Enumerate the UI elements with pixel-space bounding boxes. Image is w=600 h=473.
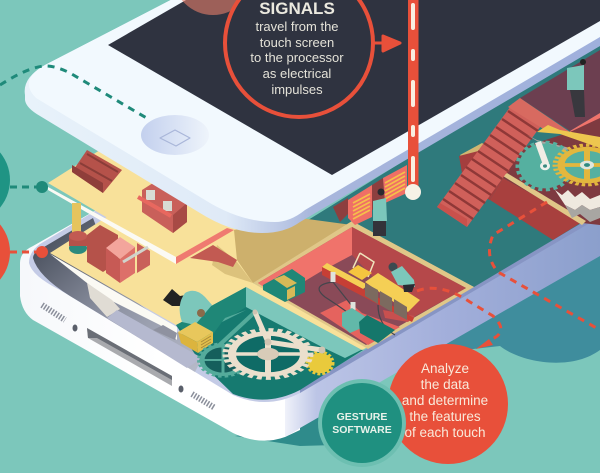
- ivory main gear: [226, 330, 310, 378]
- yellow machine bench: [322, 263, 414, 322]
- signals callout: impulses: [271, 82, 323, 97]
- red room: [253, 221, 474, 349]
- arrow to signal line: [373, 36, 400, 51]
- screw left: [72, 324, 78, 332]
- vertical signal line: [405, 0, 421, 200]
- red arrow head: [476, 339, 493, 349]
- cabinets upper floor: [138, 183, 187, 233]
- dark well: [33, 218, 205, 372]
- home button: [141, 115, 209, 155]
- signals callout: touch screen: [260, 35, 334, 50]
- phone top glass: [25, 0, 600, 233]
- yellow arm: [537, 125, 600, 148]
- screen: [108, 0, 600, 175]
- maroon upper room: [520, 50, 600, 136]
- callout red left: [0, 209, 48, 295]
- red dashed path: [417, 202, 600, 340]
- cream disc: [87, 283, 120, 317]
- dark teal box: [359, 315, 395, 343]
- phone shadow: [235, 250, 600, 446]
- inner rim: [29, 208, 300, 402]
- speaker grille right: [192, 394, 215, 408]
- pink underside stairs: [190, 245, 237, 267]
- gray battery bar: [107, 310, 202, 368]
- lower yellow floor: [50, 215, 368, 350]
- gesture software callout: SOFTWARE: [332, 424, 392, 436]
- analyze callout: the data: [421, 377, 470, 392]
- interior teal floor: [300, 40, 600, 287]
- folding chair: [348, 253, 374, 280]
- signals callout: travel from the: [255, 19, 339, 34]
- cables and pillars: [319, 272, 395, 335]
- worker by vents: [373, 188, 387, 236]
- yellow column: [72, 203, 81, 235]
- analyze callout: and determine: [402, 393, 488, 408]
- callout teal left: [0, 137, 48, 223]
- platform under stairs: [459, 143, 586, 240]
- yellow crate: [178, 322, 213, 353]
- gesture software callout: GESTURE: [337, 411, 387, 423]
- yellow gear: [555, 145, 600, 185]
- ivory arm: [255, 312, 322, 350]
- signals callout: to the processor: [250, 50, 344, 65]
- teal dashed line to home button: [0, 66, 150, 120]
- wall vents: [333, 165, 407, 225]
- stairs block: [72, 150, 122, 193]
- analyze callout: [388, 344, 508, 464]
- upper yellow floor: [48, 150, 260, 267]
- phone lower body: [20, 205, 600, 441]
- analyze callout: Analyze: [421, 361, 469, 376]
- gears lower left: [199, 310, 333, 378]
- teal gear bay: [176, 287, 363, 400]
- three drawers: [365, 273, 420, 320]
- gear pit floor: [503, 118, 600, 225]
- yellow small gear: [307, 352, 333, 374]
- gesture software callout: [318, 379, 406, 467]
- white gear: [527, 135, 600, 222]
- white arm: [535, 141, 549, 165]
- screw right: [178, 386, 184, 392]
- mechanic crouching: [163, 289, 212, 325]
- dock connector: [87, 328, 172, 386]
- hub caps: [252, 310, 326, 354]
- teal gear: [518, 143, 572, 189]
- analyze callout: the features: [409, 409, 481, 424]
- teal link arm: [200, 312, 255, 363]
- signals callout: as electrical: [263, 66, 331, 81]
- small teal plinth: [342, 308, 366, 333]
- analyze callout: of each touch: [404, 425, 486, 440]
- red and teal cylinder: [69, 231, 87, 254]
- speaker grille left: [42, 305, 65, 320]
- teal crates: [263, 269, 305, 302]
- worker with green shirt: [388, 262, 415, 292]
- worker upper right: [567, 59, 586, 117]
- signals callout: [225, 0, 373, 117]
- staircase: [437, 98, 570, 227]
- cabinets lower floor: [87, 225, 150, 283]
- pink sensor circle: [173, 0, 253, 15]
- teal gear back: [199, 344, 247, 376]
- gray small bar: [153, 325, 177, 340]
- gears upper right: [518, 125, 600, 222]
- right side strip: [285, 214, 600, 437]
